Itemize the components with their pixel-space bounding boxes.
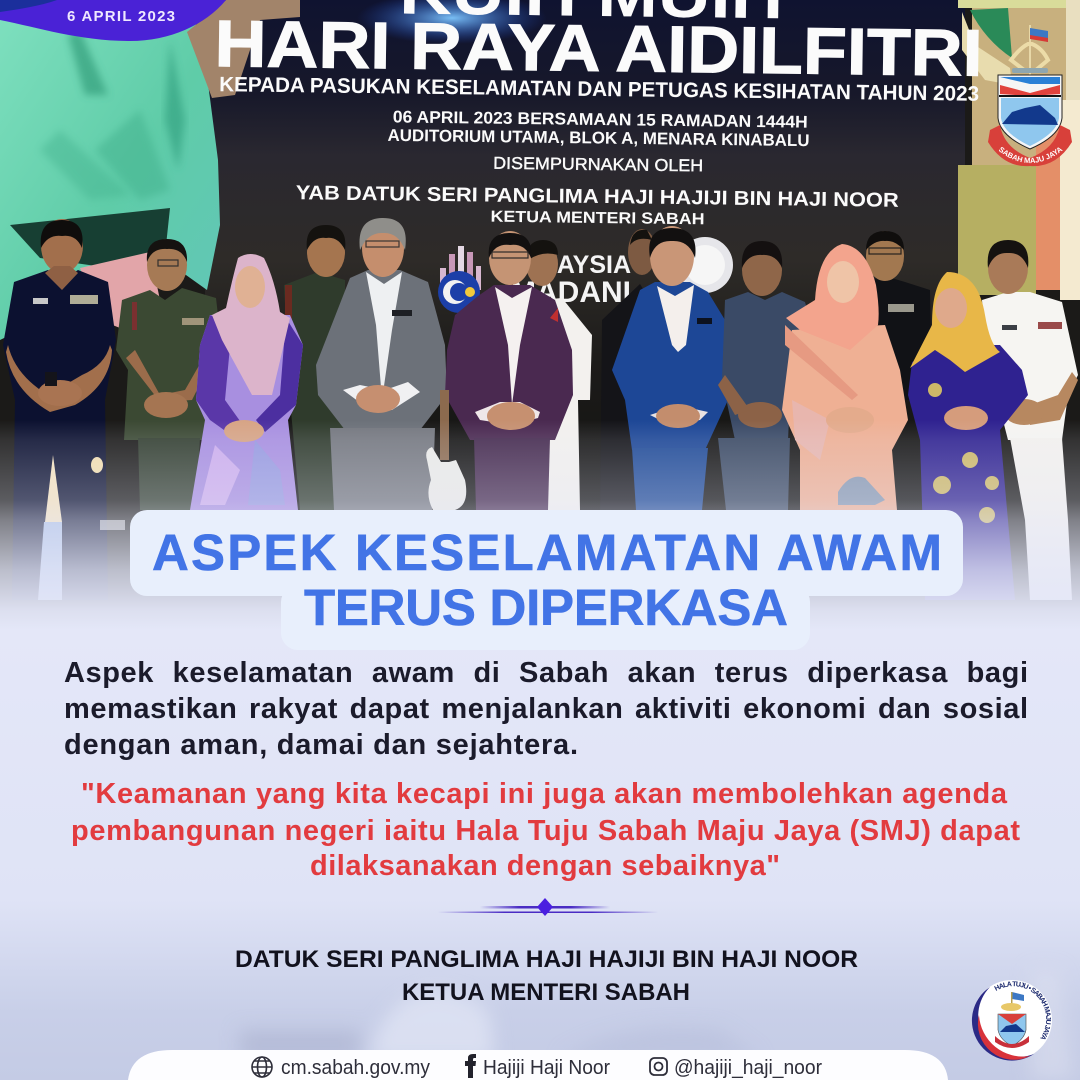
- person: lady in peach dress: [782, 244, 908, 510]
- screen title text: DISEMPURNAKAN OLEH: [493, 154, 703, 175]
- person: lady in yellow headscarf and navy dress: [908, 272, 1028, 600]
- person: Chief Minister in blue suit: [612, 226, 735, 510]
- red quote: "Keamanan yang kita kecapi ini juga akan membolehkan agenda: [81, 778, 1008, 810]
- website: cm.sabah.gov.my: [281, 1057, 430, 1079]
- icon: instagram: [650, 1058, 667, 1075]
- red quote: dilaksanakan dengan sebaiknya": [310, 850, 780, 882]
- photo fade into light lavender: [0, 420, 1080, 635]
- title line 1: ASPEK KESELAMATAN AWAM: [152, 524, 942, 581]
- screen backdrop: Malaysia Madani logo: MADANI: [511, 276, 631, 309]
- icon: scroll with motto: SABAH MAJU JAYA: [999, 147, 1063, 164]
- small coat of arms: [995, 992, 1029, 1048]
- screen title text: AUDITORIUM UTAMA, BLOK A, MENARA KINABALU: [387, 126, 810, 150]
- lens flare: [357, 0, 547, 44]
- background photo: stage screen: [0, 0, 1080, 630]
- screen title text: KEPADA PASUKAN KESELAMATAN DAN PETUGAS KESIHATAN TAHUN 2023: [219, 73, 979, 106]
- screen title text: [212, 0, 984, 232]
- body paragraph: dengan aman, damai dan sejahtera.: [64, 729, 578, 761]
- electric guitar: [426, 390, 466, 510]
- person: dark uniform rear centre: [600, 229, 656, 520]
- instagram handle: @hajiji_haji_noor: [674, 1057, 822, 1079]
- date tab: [0, 0, 226, 41]
- title panel: [130, 510, 963, 650]
- icon: globe: [252, 1057, 272, 1077]
- date tab: 6 APRIL 2023: [67, 8, 175, 25]
- person: white uniform rear centre: [526, 240, 592, 510]
- person: army general: [116, 239, 222, 510]
- screen backdrop: Malaysia Madani logo: [438, 237, 733, 313]
- attribution: [235, 946, 858, 1006]
- logo: Sabah coat of arms: [988, 25, 1072, 166]
- logo: Hala Tuju Sabah Maju Jaya: [972, 980, 1052, 1061]
- red quote: pembangunan negeri iaitu Hala Tuju Sabah Maju Jaya (SMJ) dapat: [71, 815, 1020, 847]
- screen title text: HARI RAYA AIDILFITRI: [214, 6, 983, 90]
- logo: Hala Tuju Sabah Maju Jaya: HALA TUJU • SABAH MAJU JAYA: [994, 981, 1052, 1040]
- attribution: DATUK SERI PANGLIMA HAJI HAJIJI BIN HAJI NOOR: [235, 946, 858, 973]
- person: minister in grey suit: [316, 218, 447, 510]
- facebook name: Hajiji Haji Noor: [483, 1057, 610, 1079]
- person: black uniform officer rear right: [860, 231, 932, 400]
- icon: state flag: [1029, 25, 1048, 75]
- stage light gap between legs: [38, 455, 125, 600]
- screen backdrop: right panels: [958, 0, 1080, 300]
- person: lady in purple floral dress: [190, 254, 303, 510]
- screen title text: KETUA MENTERI SABAH: [490, 209, 705, 228]
- title line 2: TERUS DIPERKASA: [304, 579, 788, 636]
- decorative divider with diamond: [438, 898, 658, 916]
- group of dignitaries on stage: [3, 218, 1078, 600]
- icon: arms holding flag: [1011, 44, 1048, 70]
- red quote: [71, 778, 1020, 882]
- icon: facebook: [465, 1054, 476, 1078]
- body paragraph: memastikan rakyat dapat menjalankan aktiviti ekonomi dan sosial: [64, 693, 1028, 725]
- screen title text: 06 APRIL 2023 BERSAMAAN 15 RAMADAN 1444H: [393, 107, 808, 132]
- icon: scroll with motto: [988, 125, 1072, 166]
- screen backdrop: green baju melayu: [0, 0, 300, 340]
- icon: shield: [998, 75, 1062, 149]
- person: white naval officer: [982, 240, 1078, 600]
- body paragraph: [64, 657, 1028, 761]
- footer bar: [128, 1050, 948, 1080]
- person: army officer rear left: [284, 225, 345, 510]
- person: air force officer: [718, 241, 810, 510]
- person: police officer: [3, 219, 116, 600]
- screen backdrop: Malaysia Madani logo: MALAYSIA: [503, 251, 631, 279]
- screen title text: YAB DATUK SERI PANGLIMA HAJI HAJIJI BIN HAJI NOOR: [296, 182, 899, 212]
- lower background with faint handshake: [0, 630, 1080, 1080]
- attribution: KETUA MENTERI SABAH: [402, 979, 690, 1006]
- person: minister in purple suit: [445, 231, 573, 510]
- body paragraph: Aspek keselamatan awam di Sabah akan terus diperkasa bagi: [64, 657, 1028, 689]
